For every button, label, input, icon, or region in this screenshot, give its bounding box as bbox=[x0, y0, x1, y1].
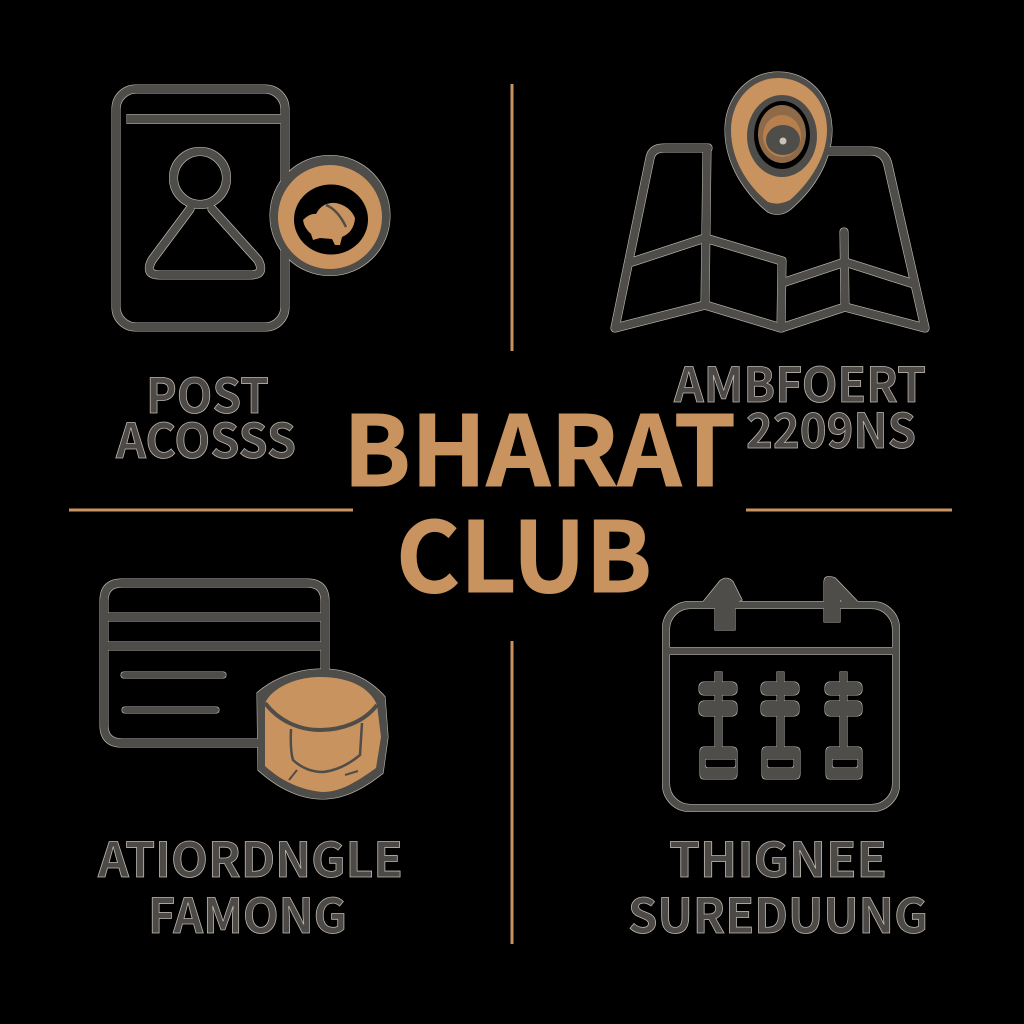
divider: bottom vertical bbox=[510, 641, 514, 944]
icon: slider column 3 bbox=[825, 672, 862, 779]
label: thignee sureduung: SUREDUUNG bbox=[628, 877, 928, 947]
divider: left horizontal bbox=[69, 508, 353, 512]
label: thignee sureduung bbox=[628, 821, 928, 947]
label: atiordngle famong: ATIORDNGLE bbox=[97, 821, 403, 891]
label: ambfoert: 2209NS bbox=[746, 392, 916, 462]
title: BHARAT bbox=[343, 373, 736, 514]
icon: location pin bbox=[725, 72, 832, 214]
label: post access bbox=[115, 357, 296, 472]
label: atiordngle famong: FAMONG bbox=[148, 877, 347, 947]
divider: right horizontal bbox=[746, 508, 952, 512]
divider: top vertical bbox=[510, 84, 514, 351]
label: post access: POST bbox=[146, 357, 269, 427]
title: CLUB bbox=[396, 479, 652, 620]
title bbox=[343, 373, 736, 620]
icon: slider column 1 bbox=[699, 672, 737, 779]
icon: folded map with pin bbox=[615, 72, 925, 328]
icon: slider column 2 bbox=[761, 672, 800, 779]
icon: card with wallet bbox=[104, 583, 388, 799]
icon: coin badge bbox=[270, 156, 390, 276]
label: post access: ACOSSS bbox=[115, 402, 296, 472]
label: thignee sureduung: THIGNEE bbox=[669, 821, 887, 891]
label: ambfoert bbox=[673, 346, 926, 462]
icon: phone profile with coin bbox=[116, 89, 390, 327]
label: atiordngle famong bbox=[97, 821, 403, 947]
icon: wallet pouch bbox=[257, 669, 388, 799]
icon: calendar with sliders bbox=[666, 577, 896, 808]
label: ambfoert: AMBFOERT bbox=[673, 346, 926, 416]
